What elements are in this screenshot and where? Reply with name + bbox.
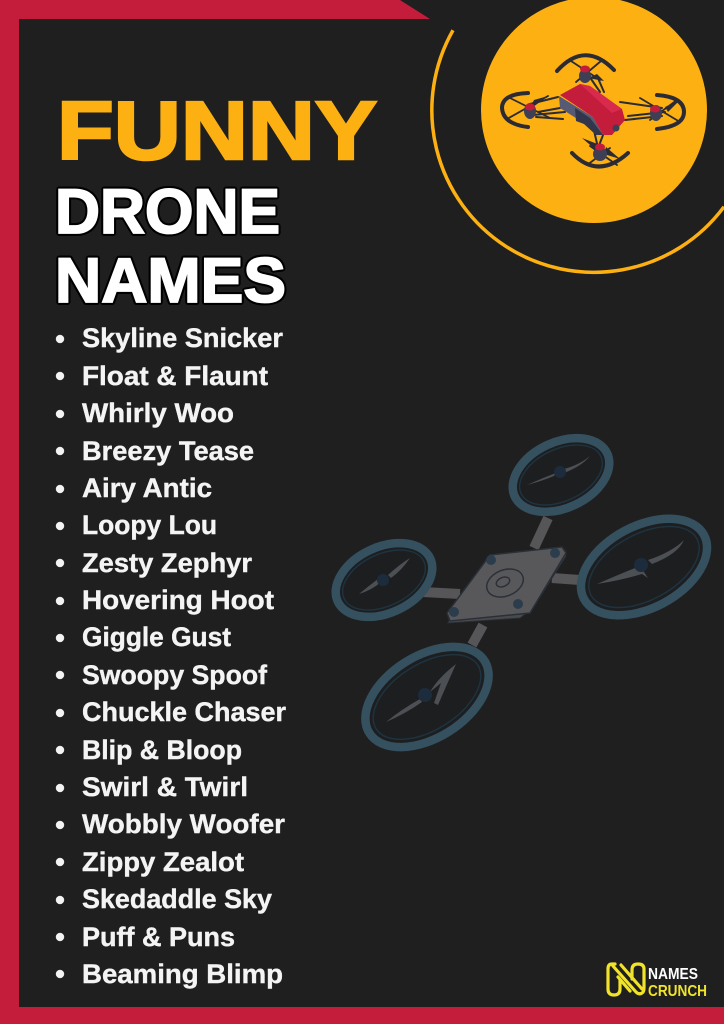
title: DRONE NAMES: NAMES [55, 246, 286, 316]
list of drone names: Puff & Puns [82, 922, 235, 952]
list of drone names: Swoopy Spoof [82, 660, 267, 690]
icon: faded background drone [324, 424, 723, 768]
list of drone names: Giggle Gust [82, 622, 231, 652]
list of drone names: Skyline Snicker [82, 323, 283, 353]
list of drone names: Zippy Zealot [82, 847, 244, 877]
yellow circle [481, 0, 707, 223]
title: DRONE NAMES: NAMES [55, 246, 286, 316]
icon: red drone [502, 55, 684, 166]
list of drone names: Blip & Bloop [82, 735, 242, 765]
list of drone names: Skedaddle Sky [82, 884, 272, 914]
list of drone names: Breezy Tease [82, 436, 254, 466]
title: DRONE NAMES [55, 177, 286, 316]
list of drone names: Zesty Zephyr [82, 548, 252, 578]
list of drone names: Loopy Lou [82, 510, 217, 540]
list of drone names: Airy Antic [82, 473, 212, 503]
list of drone names: Chuckle Chaser [82, 697, 286, 727]
logo: Names Crunch: NAMES [648, 966, 698, 983]
title: DRONE NAMES: DRONE [55, 177, 280, 247]
yellow arc around circle [432, 30, 724, 272]
title: DRONE NAMES: DRONE [55, 177, 280, 247]
title: FUNNY: FUNNY [57, 84, 377, 177]
logo: Names Crunch: CRUNCH [648, 983, 707, 1000]
list of drone names: Swirl & Twirl [82, 772, 248, 802]
list of drone names: Whirly Woo [82, 398, 234, 428]
list of drone names: Float & Flaunt [82, 361, 268, 391]
list of drone names: Hovering Hoot [82, 585, 274, 615]
list of drone names: Beaming Blimp [82, 959, 283, 989]
logo: Names Crunch [608, 964, 707, 1000]
icon: N logo mark [608, 964, 644, 995]
list of drone names [56, 323, 286, 989]
list of drone names: Wobbly Woofer [82, 809, 285, 839]
